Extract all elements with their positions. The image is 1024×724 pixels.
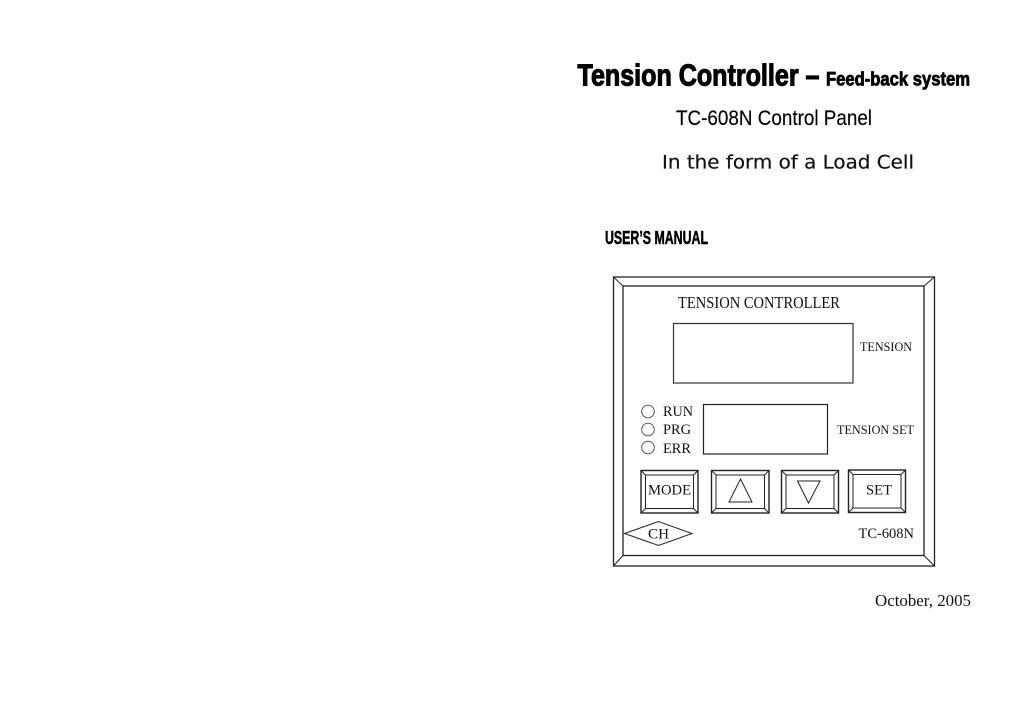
button: ch bbox=[624, 522, 692, 546]
subtitle: control panel: TC-608N Control Panel bbox=[676, 107, 872, 130]
subtitle: load cell: In the form of a Load Cell bbox=[662, 152, 914, 174]
button: mode bbox=[641, 470, 698, 513]
panel: controller front bbox=[614, 277, 934, 566]
status indicators bbox=[642, 404, 693, 457]
status indicators: ERR bbox=[663, 441, 691, 457]
title: Tension Controller – bbox=[578, 58, 820, 92]
status indicators: RUN bbox=[663, 404, 693, 420]
heading: user's manual: USER’S MANUAL bbox=[605, 228, 708, 248]
button: ch: CH bbox=[648, 526, 669, 542]
tension set display bbox=[704, 404, 828, 454]
button: down arrow bbox=[782, 470, 838, 513]
panel bezel bbox=[614, 277, 934, 566]
button: up arrow bbox=[712, 470, 769, 513]
tension set label: TENSION SET bbox=[837, 422, 914, 437]
title: Feed-back system bbox=[826, 68, 970, 90]
button: set: SET bbox=[866, 482, 892, 498]
model label: TC-608N bbox=[858, 526, 914, 542]
button: mode: MODE bbox=[648, 482, 691, 498]
date: October, 2005 bbox=[875, 591, 971, 610]
button: set bbox=[848, 470, 906, 512]
tension label: TENSION bbox=[860, 339, 913, 354]
status indicators: PRG bbox=[663, 422, 691, 438]
panel label: TENSION CONTROLLER bbox=[678, 293, 840, 312]
tension display bbox=[674, 324, 853, 383]
